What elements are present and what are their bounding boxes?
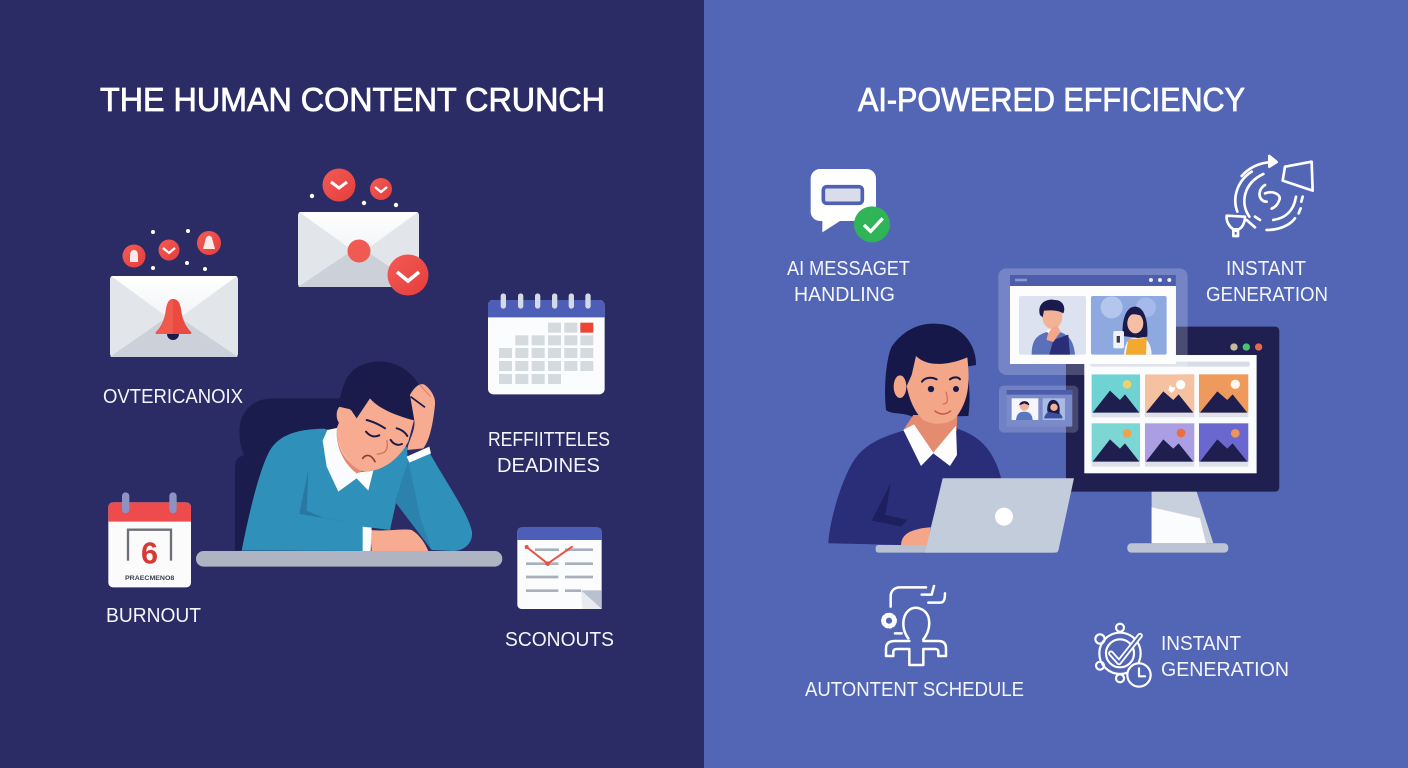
label: refiitteles deadlines [488,429,610,477]
panel: the human content crunch [0,0,704,768]
label: autontent schedule: AUTONTENT SCHEDULE [805,679,1024,701]
illustration: floating video window [998,268,1188,375]
illustration: monitor with image gallery [1066,327,1279,553]
label: instant generation second: GENERATION [1161,659,1289,681]
icon: swirl generation [1227,156,1313,236]
panel: ai-powered efficiency [704,0,1408,768]
icon: envelope with bell [110,229,238,357]
icon: document with red chart line [517,527,602,609]
label: instant generation second: INSTANT [1161,633,1241,655]
label: ai message handling: AI MESSAGET [787,258,910,280]
desk [196,551,502,567]
label: burnout: BURNOUT [106,605,201,627]
label: ai message handling [787,258,910,306]
icon: gear check with clock [1095,624,1151,687]
label: refiitteles deadlines: REFFIITTELES [488,429,610,451]
illustration: woman using laptop [828,324,1074,553]
label: instant generation: GENERATION [1206,284,1328,306]
label: sconouts: SCONOUTS [505,629,614,651]
icon: wall calendar [488,293,605,394]
icon: deadline calendar page: PRAECMENO8 [125,575,175,582]
label: instant generation: INSTANT [1226,258,1306,280]
illustration: small video call window [999,386,1078,433]
icon: deadline calendar page [108,492,191,587]
label: refiitteles deadlines: DEADINES [497,455,600,477]
label: ai message handling: HANDLING [794,284,895,306]
label: instant generation [1206,258,1328,306]
icon: deadline calendar page: 6 [141,536,158,570]
label: overticanoix: OVTERICANOIX [103,386,243,408]
illustration: stressed man at desk [196,361,502,567]
title: human content crunch: THE HUMAN CONTENT CRUNCH [100,81,605,118]
label: instant generation second [1161,633,1289,681]
icon: automated schedule person [882,586,946,665]
title: ai-powered efficiency: AI-POWERED EFFICIENCY [858,81,1245,118]
icon: envelope with check badges [298,168,428,296]
icon: chat bubble with green check [811,169,890,242]
